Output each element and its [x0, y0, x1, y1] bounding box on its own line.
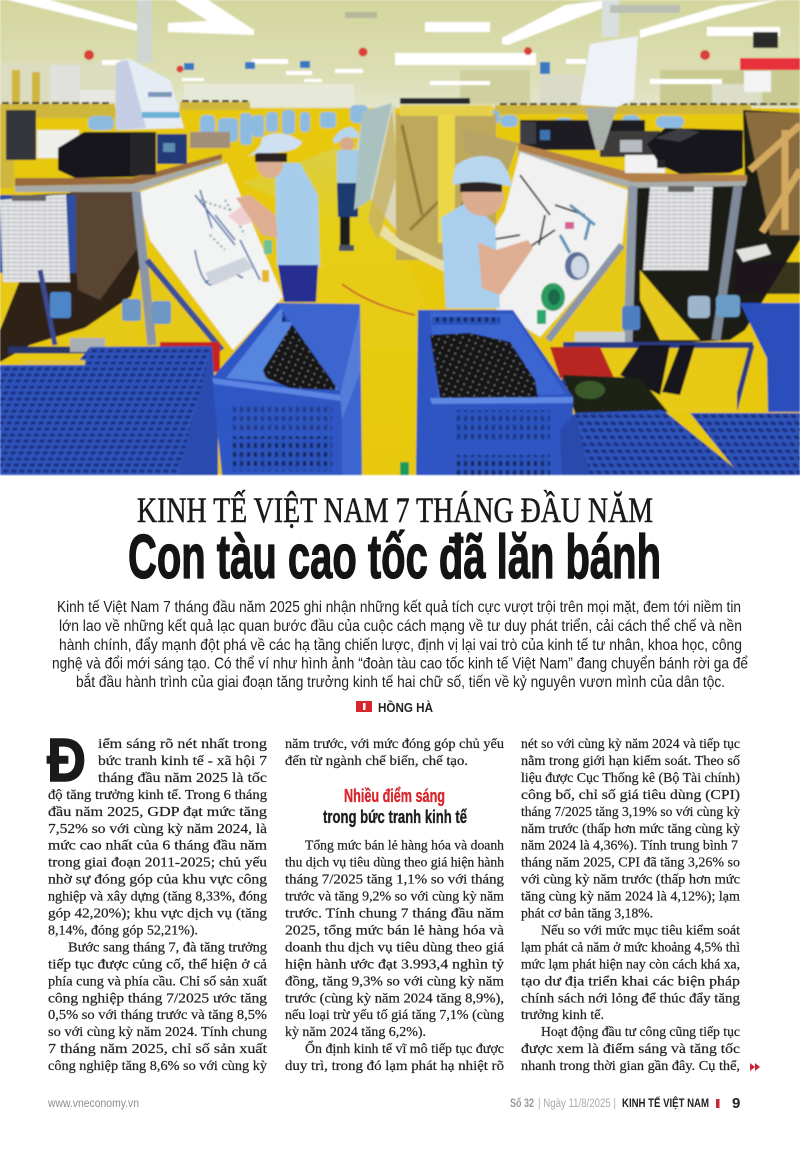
- right sign board: [580, 36, 638, 107]
- left flat crate: [0, 365, 80, 458]
- body column 1: góp 42,20%); khu vực dịch vụ (tăng: [48, 906, 267, 922]
- body column 3: tháng năm 2025, CPI đã tăng 3,26% so: [521, 855, 740, 870]
- worker left: [236, 133, 320, 302]
- author name: HỒNG HÀ: [378, 700, 434, 715]
- body column 3: nét so với cùng kỳ năm 2024 và tiếp tục: [521, 736, 740, 751]
- subheading: Nhiều điểm sáng: [344, 786, 445, 806]
- photo: factory assembly line: [0, 0, 800, 475]
- body column 1: 7 tháng năm 2025, chỉ số sản xuất: [48, 1041, 267, 1056]
- yellow floor: [243, 146, 425, 475]
- intro paragraph: [52, 599, 748, 691]
- white bench on left: [37, 130, 79, 158]
- body column 3: công bố, chỉ số giá tiêu dùng (CPI): [521, 787, 740, 803]
- body column 2: thu dịch vụ tiêu dùng theo giá hiện hành: [285, 855, 504, 870]
- body column 2: trước (cùng kỳ năm 2024 tăng 8,9%),: [285, 990, 504, 1006]
- right parts cups: [575, 295, 740, 342]
- basket left: [212, 303, 362, 475]
- small white sign: [744, 71, 771, 92]
- vertical guide boards: [354, 103, 398, 240]
- body column 1: tháng đầu năm 2025 là tốc: [98, 770, 267, 785]
- footer issue: Số 32: [510, 1098, 534, 1110]
- body column 2: đồng, tăng 9,3% so với cùng kỳ năm: [285, 973, 504, 988]
- body column 2: Ổn định kinh tế vĩ mô tiếp tục được: [305, 1039, 504, 1056]
- body column 1: đầu năm 2025, GDP đạt mức tăng: [48, 804, 267, 819]
- body column 1: nghiệp và xây dựng (tăng 8,33%, đóng: [48, 889, 267, 905]
- body column 1: độ tăng trưởng kinh tế. Trong 6 tháng: [48, 787, 267, 802]
- right workstation board: [488, 152, 628, 337]
- body column 1: công nghiệp tăng 8,6% so với cùng kỳ: [48, 1058, 267, 1073]
- body column 1: mức cao nhất của 6 tháng đầu năm: [48, 838, 267, 853]
- body column 3: năm 2024 là 4,36%). Tính trung bình 7: [521, 838, 738, 854]
- red floor line: [342, 284, 415, 315]
- body column 1: 8,14%, đóng góp 52,21%).: [48, 922, 198, 938]
- background workers: [88, 105, 684, 145]
- body column 3: Hoạt động đầu tư công cũng tiếp tục: [541, 1024, 740, 1039]
- body column 2: duy trì, trong đó lạm phát hạ nhiệt rõ: [285, 1058, 504, 1073]
- body column 3: tăng cùng kỳ năm 2024 là 4,12%); lạm: [521, 889, 740, 905]
- icon: red author badge: [356, 701, 372, 712]
- body column 3: liệu được Cục Thống kê (Bộ Tài chính): [521, 770, 740, 786]
- body column 3: mức lạm phát hiện nay còn cách khá xa,: [521, 956, 740, 971]
- body column 2: doanh thu dịch vụ tiêu dùng theo giá: [285, 939, 504, 954]
- ceiling poles and sirens: [84, 0, 778, 74]
- body column 1: [48, 736, 267, 1073]
- red bar: [740, 58, 800, 70]
- body column 1: công nghiệp tháng 7/2025 ước tăng: [48, 990, 267, 1005]
- subheading: [323, 786, 468, 827]
- body column 2: tháng 7/2025 tăng 1,1% so với tháng: [285, 872, 504, 887]
- dark machinery on left: [6, 110, 36, 160]
- body column 2: 2025, tổng mức bán lẻ hàng hóa và: [285, 922, 504, 938]
- body column 3: nằm trong giới hạn kiểm soát. Theo số: [521, 753, 740, 768]
- body column 3: nhanh trong thời gian gần đây. Cụ thể,: [521, 1058, 740, 1073]
- footer date: | Ngày 11/8/2025 |: [538, 1098, 616, 1110]
- body column 2: nếu loại trừ yếu tố giá tăng 7,1% (cùng: [285, 1007, 504, 1023]
- body column 3: năm trước (thấp hơn mức tăng cùng kỳ: [521, 821, 740, 837]
- body column 2: trước. Tính chung 7 tháng đầu năm: [285, 906, 504, 920]
- basket right: [400, 310, 573, 475]
- factory ceiling and back wall: [0, 0, 800, 108]
- right background dark machinery: [520, 107, 660, 157]
- right table top: [518, 143, 747, 188]
- lower right yellow floor and legs: [550, 345, 737, 413]
- kicker heading: KINH TẾ VIỆT NAM 7 THÁNG ĐẦU NĂM: [137, 490, 653, 530]
- far worker: [333, 127, 369, 251]
- body column 3: lạm phát cả năm ở mức khoảng 4,5% thì: [521, 939, 740, 954]
- right paper on clipboard: [643, 186, 713, 270]
- footer magazine name: KINH TẾ VIỆT NAM: [622, 1095, 709, 1110]
- left printer: [58, 132, 230, 178]
- body column 1: Bước sang tháng 7, đà tăng trưởng: [68, 939, 267, 954]
- right side wooden frames and dark space: [563, 110, 800, 345]
- dark wires on benches: [2, 101, 800, 104]
- back station on centre: [352, 98, 518, 272]
- body column 2: trước và tăng 9,2% so với cùng kỳ năm: [285, 889, 504, 904]
- body column 2: hiện hành ước đạt 3.993,4 nghìn tỷ: [285, 956, 504, 971]
- left metal frame: [8, 192, 222, 350]
- footer website: www.vneconomy.vn: [47, 1098, 139, 1110]
- worker centre: [441, 156, 533, 308]
- right crate far: [690, 413, 800, 475]
- body column 3: phát cơ bản tăng 3,18%.: [521, 906, 653, 920]
- body column 2: đến từ ngành chế biến, chế tạo.: [285, 753, 468, 768]
- yellow benches in the background: [0, 70, 800, 235]
- body column 3: tháng 7/2025 tăng 3,19% so với cùng kỳ: [521, 804, 740, 819]
- right metal frame: [548, 186, 753, 410]
- left table top: [15, 154, 222, 192]
- body column 1: trong giai đoạn 2011-2025; chủ yếu: [48, 855, 267, 870]
- body column 3: tạo dư địa triển khai các biện pháp: [521, 973, 740, 988]
- body column 1: phía cung và phía cầu. Chỉ số sản xuất: [48, 973, 267, 988]
- body column 1: so với cùng kỳ năm 2024. Tính chung: [48, 1024, 267, 1039]
- white tablet and wires right: [735, 244, 800, 294]
- body column 3: với cùng kỳ năm trước (thấp hơn mức: [521, 872, 740, 888]
- icon: continue arrow: [750, 1063, 760, 1071]
- body column 1: 0,5% so với tháng trước và tăng 8,5%: [48, 1007, 267, 1022]
- body column 2: Tổng mức bán lẻ hàng hóa và doanh: [305, 838, 504, 853]
- byline: [356, 700, 434, 715]
- left workstation board: [137, 163, 283, 350]
- red crate behind basket: [160, 342, 220, 372]
- right crate centre: [560, 410, 743, 475]
- body column 1: nhờ sự đóng góp của khu vực công: [48, 872, 267, 887]
- body column 1: bức tranh kinh tế - xã hội 7: [98, 753, 267, 768]
- subheading: trong bức tranh kinh tế: [323, 807, 468, 827]
- left crate stack: [0, 346, 218, 475]
- ceiling lights: [8, 0, 780, 85]
- body column 3: Nếu so với mức mục tiêu kiểm soát: [541, 922, 740, 938]
- body column 1: 7,52% so với cùng kỳ năm 2024, là: [48, 821, 267, 836]
- body column 3: trưởng kinh tế.: [521, 1007, 604, 1022]
- body column 3: [521, 736, 740, 1073]
- body column 2: kỳ năm 2024 tăng 6,2%).: [285, 1024, 426, 1040]
- body column 1: tiếp tục được củng cố, thể hiện ở cả: [48, 956, 267, 971]
- top right crate: [740, 303, 800, 412]
- body column 2: [285, 736, 504, 1073]
- body column 3: được xem là điểm sáng và tăng tốc: [521, 1041, 740, 1056]
- footer red mark: [716, 1099, 720, 1108]
- body column 2: năm trước, với mức đóng góp chủ yếu: [285, 736, 504, 751]
- intro paragraph: bắt đầu hành trình của giai đoạn tăng trưởng kinh tế hai chữ số, tiến về kỷ nguyên vươn mình của dân tộc.: [76, 672, 725, 691]
- left parts cups: [50, 292, 171, 352]
- body column 3: chính sách nới lỏng để thúc đẩy tăng: [521, 990, 740, 1005]
- right printer: [647, 128, 743, 174]
- left dark area under bench: [0, 190, 145, 362]
- body column 1: iểm sáng rõ nét nhất trong: [98, 736, 267, 751]
- left sign board: [116, 58, 184, 130]
- drop cap: Đ: [47, 726, 86, 794]
- page number: 9: [732, 1095, 740, 1112]
- left paper on clipboard: [0, 194, 76, 282]
